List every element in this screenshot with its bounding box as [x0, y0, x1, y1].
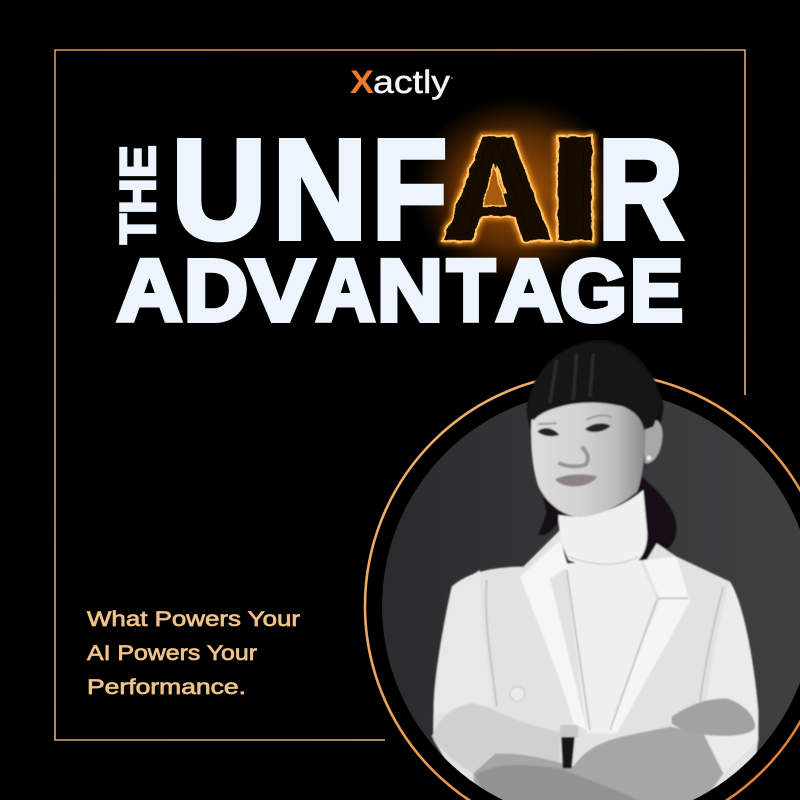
inner white top — [565, 560, 657, 733]
face — [531, 400, 645, 517]
tagline: Performance. — [87, 676, 246, 699]
left lapel — [520, 540, 587, 730]
title word: AI in electric outline: A — [445, 109, 550, 267]
blazer fold lines — [486, 570, 723, 730]
logo: Xactly: X — [350, 64, 375, 100]
title word: ADVANTAGE: E — [630, 242, 683, 340]
lips — [555, 474, 597, 486]
left sleeve — [432, 570, 481, 710]
title word: AI in electric outline: A — [445, 109, 550, 267]
title word: ADVANTAGE: A — [117, 242, 182, 340]
turtleneck — [558, 490, 647, 567]
title word: AI in electric outline: A — [445, 109, 550, 267]
A counter outline — [483, 165, 506, 206]
hair with ponytail — [527, 340, 677, 567]
wristwatch strap — [561, 735, 575, 768]
title word: ADVANTAGE: A — [496, 242, 562, 340]
neck fold — [568, 557, 638, 564]
earring — [647, 456, 651, 460]
decorative frame — [55, 50, 745, 740]
logo: Xactly — [350, 64, 453, 100]
title word: UNF: F — [372, 110, 447, 268]
crossed forearm — [473, 727, 723, 800]
blazer button — [510, 687, 525, 701]
title word: UNF: U — [172, 110, 266, 268]
brows — [538, 415, 612, 424]
tagline: What Powers Your — [87, 608, 300, 631]
title word: ADVANTAGE: N — [377, 242, 443, 340]
tagline: AI Powers Your — [87, 642, 257, 665]
lower forearm — [475, 765, 640, 800]
left hand — [432, 703, 560, 773]
torso and blazer base — [433, 530, 758, 800]
ear — [643, 419, 663, 463]
title word: AI in electric outline: I — [551, 109, 599, 267]
tagline — [87, 608, 300, 699]
title: The Unfair Advantage — [110, 96, 683, 340]
title word: ADVANTAGE — [117, 242, 683, 340]
portrait: woman in white blazer — [432, 340, 758, 800]
title word: AI in electric outline — [445, 109, 599, 267]
right hand — [672, 698, 755, 736]
fringe highlight — [550, 353, 593, 403]
nose shadow — [558, 447, 588, 466]
title word: ADVANTAGE: T — [447, 242, 495, 340]
logo: Xactly: actly — [373, 64, 450, 100]
title word: R: R — [598, 110, 683, 268]
eyes — [537, 423, 611, 436]
title word: ADVANTAGE: G — [560, 242, 627, 340]
fringe — [528, 343, 662, 430]
title word: AI in electric outline: I — [551, 109, 599, 267]
portrait ring — [365, 373, 800, 800]
title word: ADVANTAGE: V — [247, 242, 314, 340]
title word: UNF: N — [273, 110, 367, 268]
title word: AI in electric outline: I — [551, 109, 599, 267]
right lapel — [617, 556, 690, 730]
watch face — [560, 725, 578, 737]
portrait backdrop circle — [382, 390, 800, 800]
glow behind AI — [413, 96, 621, 284]
title word: ADVANTAGE: D — [184, 242, 248, 340]
right sleeve — [703, 582, 758, 773]
title word: ADVANTAGE: A — [316, 242, 375, 340]
title word: UNF — [172, 110, 447, 268]
title word: THE (rotated): THE — [110, 145, 166, 244]
